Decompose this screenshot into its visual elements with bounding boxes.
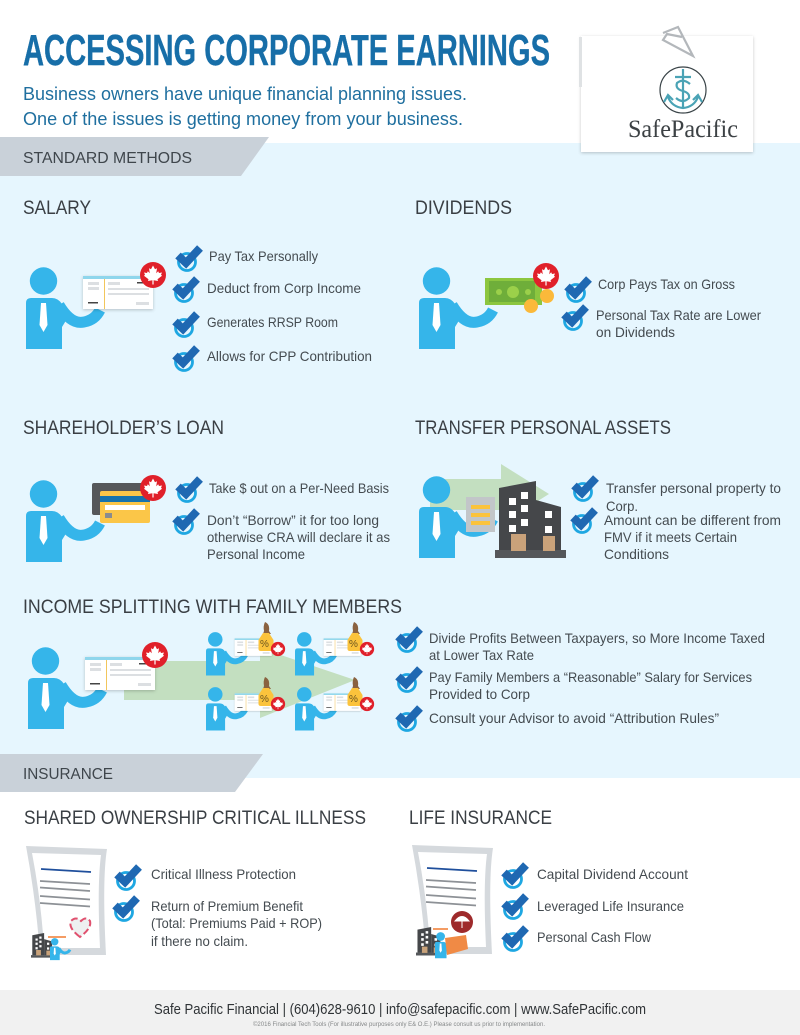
checklist: transfer: Amount can be different from <box>604 512 781 528</box>
heading: shareholder's loan: SHAREHOLDER’S LOAN <box>23 418 224 439</box>
heading: income splitting: INCOME SPLITTING WITH FAMILY MEMBERS <box>23 597 402 618</box>
checklist: salary: Generates RRSP Room <box>207 314 338 330</box>
checklist: critical illness: Critical Illness Protection <box>151 866 296 882</box>
icon: anchor logo <box>660 67 706 113</box>
icon: person, document, arrow and building <box>419 464 566 558</box>
icon: paperclip <box>663 27 693 56</box>
checklist: income splitting <box>398 629 765 730</box>
heading: dividends: DIVIDENDS <box>415 198 512 219</box>
checklist: life insurance: Leveraged Life Insurance <box>537 898 684 914</box>
checklist: life insurance: Capital Dividend Account <box>537 866 688 882</box>
light blue content background <box>0 143 800 778</box>
checklist: income splitting: Pay Family Members a “Reasonable” Salary for Services <box>429 669 752 685</box>
panel: salary <box>23 198 372 370</box>
checklist: critical illness: Return of Premium Benefit <box>151 898 303 914</box>
checklist: loan: otherwise CRA will declare it as <box>207 529 390 545</box>
checklist: life insurance <box>504 865 688 950</box>
checklist: transfer: Corp. <box>606 498 638 514</box>
checklist: loan: Take $ out on a Per-Need Basis <box>209 480 389 496</box>
icon: policy document with umbrella <box>412 845 493 958</box>
icon: family member group <box>206 622 374 730</box>
checklist: salary: Deduct from Corp Income <box>207 280 361 296</box>
checklist: income splitting: Provided to Corp <box>429 686 530 702</box>
panel: income splitting <box>23 597 765 730</box>
checklist: life insurance: Personal Cash Flow <box>537 929 652 945</box>
icon: main person with cheque <box>28 642 168 729</box>
checklist: transfer <box>573 478 781 562</box>
checklist: transfer: Conditions <box>604 546 669 562</box>
checklist: critical illness: (Total: Premiums Paid + ROP) <box>151 915 322 931</box>
checklist: transfer: Transfer personal property to <box>606 480 781 496</box>
checklist: dividends: Corp Pays Tax on Gross <box>598 276 735 292</box>
panel: life insurance <box>409 808 688 958</box>
checklist: dividends: Personal Tax Rate are Lower <box>596 307 761 323</box>
title: ACCESSING CORPORATE EARNINGS <box>23 26 550 75</box>
checklist: dividends <box>564 276 761 340</box>
subtitle <box>23 83 467 129</box>
logo card <box>579 27 753 152</box>
footer <box>0 990 800 1035</box>
panel: transfer personal assets <box>415 418 781 562</box>
arrow: income split <box>124 648 355 718</box>
checklist: loan <box>175 479 390 562</box>
checklist: critical illness: if there no claim. <box>151 933 248 949</box>
subtitle: One of the issues is getting money from your business. <box>23 108 463 129</box>
banner: standard methods: STANDARD METHODS <box>23 150 192 167</box>
checklist: salary: Pay Tax Personally <box>209 248 318 264</box>
heading: salary: SALARY <box>23 198 91 219</box>
icon: person with cheque <box>26 262 166 349</box>
icon: policy document with heart <box>26 846 107 960</box>
checklist: income splitting: Divide Profits Between Taxpayers, so More Income Taxed <box>429 630 765 646</box>
heading: critical illness: SHARED OWNERSHIP CRITICAL ILLNESS <box>24 808 366 829</box>
footer contact line: Safe Pacific Financial | (604)628-9610 | info@safepacific.com | www.SafePacific.com <box>154 1002 646 1018</box>
checklist: dividends: on Dividends <box>596 324 675 340</box>
panel: dividends <box>415 198 761 349</box>
checklist: income splitting: at Lower Tax Rate <box>429 647 534 663</box>
panel: shareholder's loan <box>23 418 390 562</box>
checklist: salary: Allows for CPP Contribution <box>207 348 372 364</box>
checklist: income splitting: Consult your Advisor to avoid “Attribution Rules” <box>429 710 719 726</box>
checklist: critical illness <box>115 866 322 949</box>
logo wordmark: SafePacific <box>628 116 738 143</box>
icon: person with money <box>419 263 559 349</box>
banner: standard methods <box>0 137 269 176</box>
icon: person with credit cards <box>26 475 166 562</box>
heading: transfer personal assets: TRANSFER PERSONAL ASSETS <box>415 418 671 439</box>
banner: insurance: INSURANCE <box>23 766 113 783</box>
checklist: loan: Don’t “Borrow” it for too long <box>207 512 379 528</box>
footer disclaimer: ©2016 Financial Tech Tools (For illustrative purposes only E& O.E.) Please consult us prior to implementation. <box>253 1020 545 1028</box>
heading: life insurance: LIFE INSURANCE <box>409 808 552 829</box>
checklist: salary <box>175 248 372 370</box>
banner: insurance <box>0 754 263 792</box>
checklist: transfer: FMV if it meets Certain <box>604 529 737 545</box>
panel: shared ownership critical illness <box>24 808 366 960</box>
checklist: loan: Personal Income <box>207 546 305 562</box>
subtitle: Business owners have unique financial planning issues. <box>23 83 467 104</box>
